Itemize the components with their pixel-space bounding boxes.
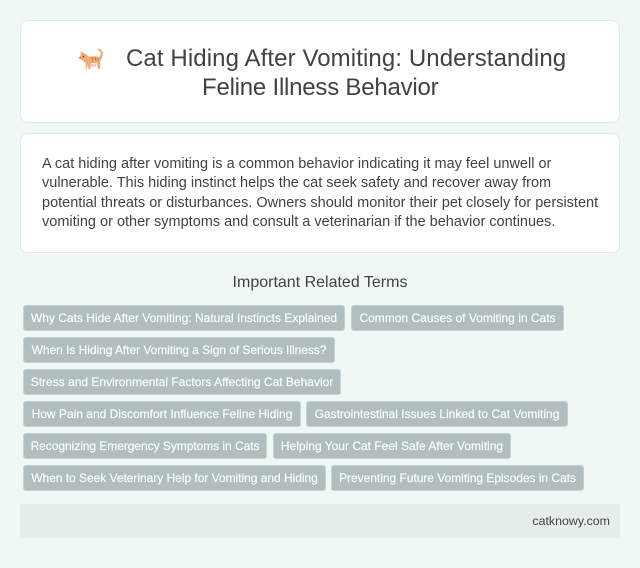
panel: related term tags xyxy=(23,305,584,491)
title card: Cat Hiding After Vomiting: Understanding xyxy=(126,45,566,72)
tag xyxy=(273,433,511,459)
tag: Helping Your Cat Feel Safe After Vomiting xyxy=(281,439,503,453)
footer bar xyxy=(20,504,620,538)
tag xyxy=(331,465,584,491)
description text: A cat hiding after vomiting is a common behavior indicating it may feel unwell or xyxy=(42,156,551,172)
title text xyxy=(126,45,566,101)
heading: related terms: Important Related Terms xyxy=(233,274,407,291)
title card xyxy=(20,20,620,123)
tag xyxy=(306,401,568,427)
tag: Why Cats Hide After Vomiting: Natural Instincts Explained xyxy=(31,311,337,325)
description text: vulnerable. This hiding instinct helps the cat seek safety and recover away from xyxy=(42,175,551,191)
tag xyxy=(23,401,301,427)
tag xyxy=(351,305,564,331)
tag: How Pain and Discomfort Influence Feline Hiding xyxy=(32,407,292,421)
footer source text: catknowy.com xyxy=(532,514,610,528)
panel: intro description xyxy=(20,133,620,253)
tag: When Is Hiding After Vomiting a Sign of Serious Illness? xyxy=(32,343,326,357)
description text: potential threats or disturbances. Owners should monitor their pet closely for persistent xyxy=(42,194,598,210)
tag xyxy=(23,369,341,395)
tag xyxy=(23,433,267,459)
tag: Preventing Future Vomiting Episodes in Cats xyxy=(339,471,576,485)
title card: Feline Illness Behavior xyxy=(202,74,438,101)
tag xyxy=(23,305,345,331)
tag: Recognizing Emergency Symptoms in Cats xyxy=(31,439,259,453)
description text: vomiting or other symptoms and consult a veterinarian if the behavior continues. xyxy=(42,214,555,230)
description text xyxy=(42,156,598,230)
tag: Common Causes of Vomiting in Cats xyxy=(359,311,556,325)
tag: When to Seek Veterinary Help for Vomiting and Hiding xyxy=(31,471,318,485)
tag xyxy=(23,465,326,491)
tag xyxy=(23,337,335,363)
tag: Stress and Environmental Factors Affecting Cat Behavior xyxy=(31,375,333,389)
tag: Gastrointestinal Issues Linked to Cat Vomiting xyxy=(315,407,559,421)
icon: cat xyxy=(79,48,103,70)
